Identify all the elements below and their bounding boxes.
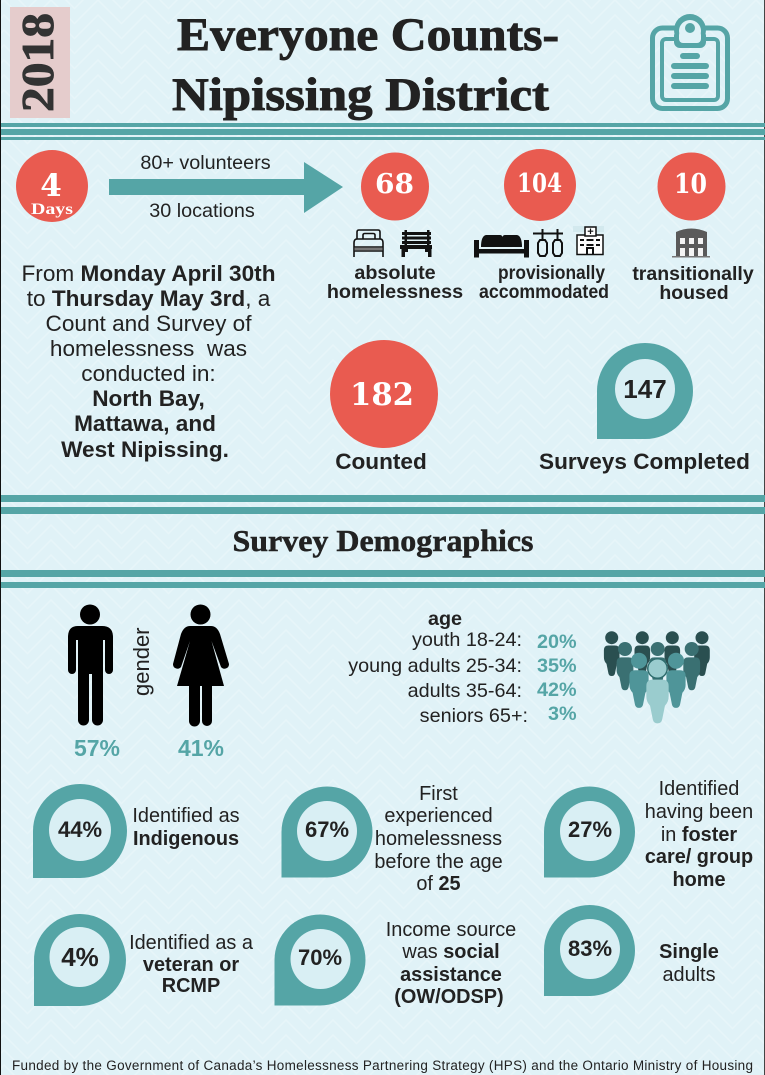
arrow with volunteers and locations: 30 locations [149,200,255,222]
stat: 67% first homeless: of 25 [416,873,461,895]
year tag: 2018 [12,13,63,112]
icon: building [672,228,710,258]
stat: 70% income source [274,914,516,1008]
intro text block [22,261,276,462]
age breakdown: 35% [537,655,577,677]
title: Nipissing District [172,69,549,121]
stat: 147 surveys completed: 147 [623,374,667,404]
provisionally accommodated: 104 [517,169,562,199]
title [172,9,559,121]
age breakdown: young adults 25-34: [348,655,522,677]
age breakdown [348,608,577,727]
stat: 27% foster care: Identified [659,778,739,800]
stat: 147 surveys completed: Surveys Completed [539,449,750,474]
stat: 70% income source: assistance [400,964,502,986]
transitionally housed [632,152,754,304]
stat: 83% single adults: adults [662,964,716,986]
icon: hospital [573,226,604,254]
stat: 27% foster care: 27% [568,817,612,842]
icon: bed [354,230,383,257]
stat: 44% indigenous: 44% [58,817,102,842]
gender chart [68,604,229,761]
badge: 4 days: 4 [40,168,62,204]
age breakdown: adults 35-64: [408,680,522,702]
badge: 4 days: Days [31,201,73,218]
icon: bench [400,230,432,257]
lower divider bands [1,570,765,588]
gender chart: 41% [178,735,224,761]
age breakdown: 20% [537,631,577,653]
stat: 27% foster care [544,778,753,891]
age breakdown: 3% [548,703,577,725]
stat: 44% indigenous [33,784,240,878]
arrow with volunteers and locations [109,152,343,222]
age breakdown: youth 18-24: [412,629,522,651]
top divider bands [1,123,765,140]
stat: 27% foster care: in foster [661,824,737,846]
arrow with volunteers and locations: 80+ volunteers [140,152,271,174]
stat: 83% single adults [544,905,719,996]
stat: 27% foster care: home [672,869,726,891]
stat: 70% income source: 70% [298,945,342,970]
stat: 4% veteran [34,914,254,1006]
stat: 67% first homeless: First [419,783,458,805]
section heading: Survey Demographics [232,523,534,558]
mid divider bands [1,495,765,514]
age breakdown: 42% [537,679,577,701]
transitionally housed: 10 [674,169,707,200]
stat: 67% first homeless: homelessness [375,828,502,850]
icon: clipboard [652,14,728,108]
age breakdown: age [428,608,462,630]
stat: 4% veteran: veteran or [143,954,239,976]
stat: 4% veteran: 4% [61,942,99,972]
stat: 67% first homeless: experienced [384,805,493,827]
age breakdown: seniors 65+: [420,705,528,727]
stat: 67% first homeless [282,783,503,895]
stat: 70% income source: (OW/ODSP) [394,986,504,1008]
gender label: gender [129,627,154,696]
stat: 83% single adults: 83% [568,936,612,961]
footer funding note: Funded by the Government of Canada’s Homelessness Partnering Strategy (HPS) and the Ontario Ministry of Housing [12,1058,753,1073]
intro text block: From Monday April 30th [22,261,276,286]
stat: 44% indigenous: Indigenous [133,828,239,850]
provisionally accommodated: accommodated [479,281,609,303]
absolute homelessness: homelessness [327,281,463,303]
intro text block: Mattawa, and [74,411,216,436]
icon: sofa [474,235,529,258]
icon: woman [173,604,229,726]
transitionally housed: housed [659,282,729,304]
absolute homelessness: absolute [354,262,436,284]
stat: 67% first homeless: 67% [305,817,349,842]
absolute homelessness [327,152,463,303]
title: Everyone Counts- [177,9,559,61]
stat: 70% income source: was social [401,941,500,963]
provisionally accommodated: provisionally [498,262,605,284]
stat: 147 surveys completed [539,343,750,474]
badge: 4 days [16,150,88,222]
intro text block: conducted in: [81,361,216,386]
transitionally housed: transitionally [632,263,754,285]
absolute homelessness: 68 [375,169,414,200]
stat: 83% single adults: Single [659,941,719,963]
stat: 70% income source: Income source [386,919,516,941]
stat: 44% indigenous: Identified as [132,805,240,827]
stat: 27% foster care: having been [645,801,753,823]
intro text block: to Thursday May 3rd, a [27,286,271,311]
stat: 182 counted: 182 [350,377,414,413]
gender chart: 57% [74,735,120,761]
intro text block: North Bay, [92,386,205,411]
provisionally accommodated [474,149,609,303]
stat: 182 counted: Counted [335,449,427,474]
intro text block: Count and Survey of [46,311,252,336]
stat: 67% first homeless: before the age [374,851,503,873]
icon: shelter beds [533,229,563,256]
icon: man [68,604,113,726]
intro text block: homelessness was [50,336,247,361]
stat: 4% veteran: RCMP [162,975,220,997]
stat: 27% foster care: care/ group [645,846,753,868]
icon: group of people [604,631,710,723]
intro text block: West Nipissing. [61,437,229,462]
stat: 4% veteran: Identified as a [129,932,254,954]
stat: 182 counted [330,340,438,474]
